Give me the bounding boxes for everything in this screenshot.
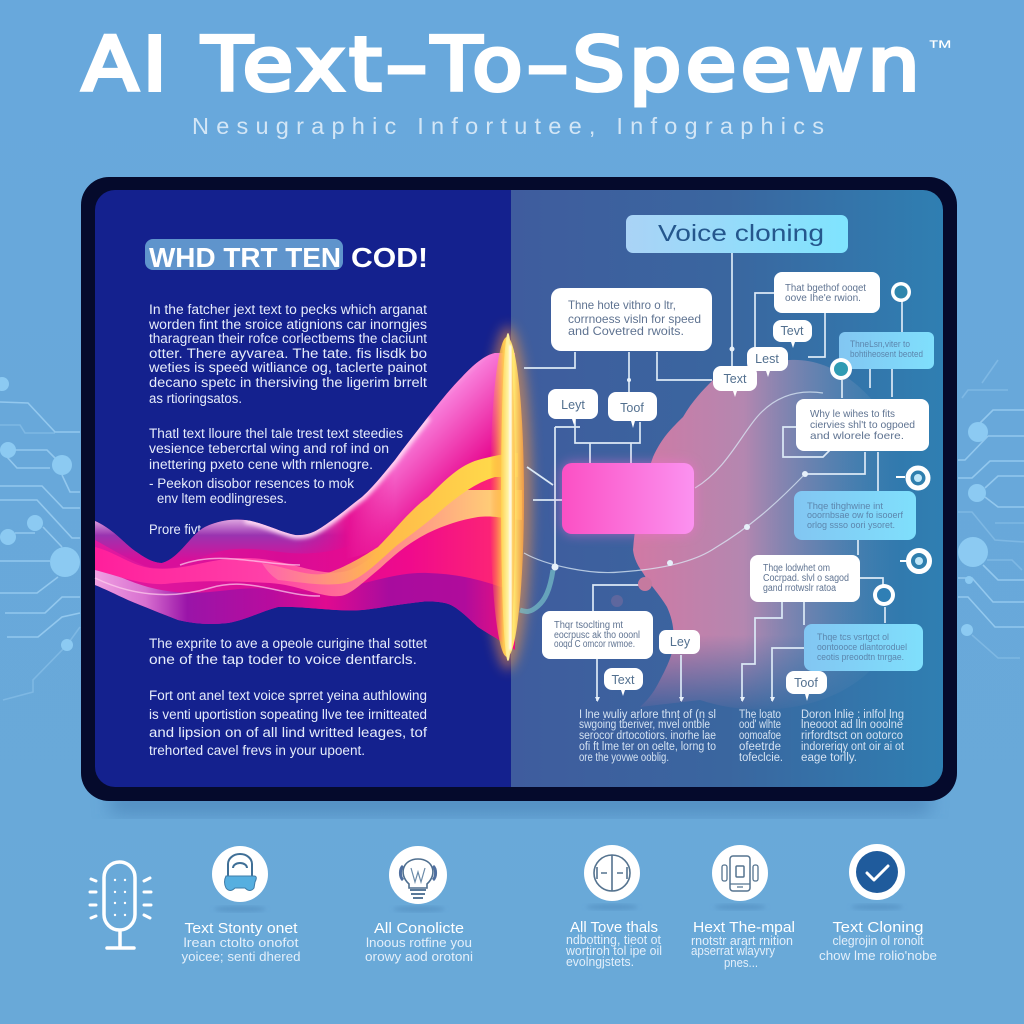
left text block 3 (149, 636, 427, 667)
tag: Text: Text (724, 372, 747, 386)
left text block 2: Prore fivt (149, 522, 201, 537)
callout: blue lower: oontoooce dlantoroduel (817, 642, 907, 653)
beam core (509, 345, 512, 650)
title: ™ (927, 37, 953, 59)
callout: blue middle: ooornbsae ow fo isooerf (807, 510, 903, 521)
feature: hext the meal (691, 845, 795, 970)
tag: Toof (608, 392, 657, 428)
callout: white lower left (542, 611, 653, 659)
callout: blue lower: ceotis preoodtn tnrgae. (817, 652, 904, 663)
icon: badge top right (891, 282, 911, 302)
panel shadow (110, 790, 930, 814)
feature: all tove thals (565, 845, 662, 969)
feature: hext the meal: rnotstr arart rnition (691, 934, 793, 948)
wave highlight strands (95, 558, 320, 596)
wave peach band (95, 490, 522, 596)
icon: phone (712, 845, 768, 910)
callout: blue lower: Thqe tcs vsrtgct ol (817, 632, 889, 643)
feature: all conlicte (365, 846, 473, 964)
feature: all tove thals: evolngjstets. (566, 955, 634, 969)
callout: blue middle: orlog ssso oori ysoret. (807, 520, 895, 531)
wave purple lower band (95, 568, 515, 650)
tag: Toof lower (786, 671, 827, 701)
right text column 1: swgoing tberiver, mvel ontble (579, 719, 710, 731)
feature: all conlicte: lnoous rotfine you (366, 936, 472, 950)
right text column 1 (579, 709, 716, 764)
callout: white lower right: Thqe lodwhet om (763, 563, 830, 574)
feature: text cloning (819, 844, 937, 963)
left text block 4: Fort ont anel text voice sprret yeina authlowing (149, 688, 427, 703)
right text column 3: eage torlly. (801, 752, 857, 764)
icon: headset (212, 846, 268, 912)
left text block 3: The exprite to ave a opeole curigine thal sottet (149, 636, 427, 651)
tag: Lest (747, 347, 788, 377)
right text column 2: ood' wlhte (739, 719, 781, 731)
icon: ring right upper (896, 468, 928, 488)
callout: white lower right: gand rrotwslr ratoa (763, 583, 836, 594)
callout: white lower left: eocrpusc ak tho ooonl (554, 630, 640, 641)
tag: Ley (659, 630, 700, 654)
icon: badge middle (830, 358, 852, 380)
callout: main top left: Thne hote vithro o ltr, (568, 298, 676, 312)
left text block 2: inettering pxeto cene wlth rnlenogre. (149, 457, 373, 472)
callout: top right (774, 272, 880, 313)
icon: light bulb (389, 846, 447, 912)
left heading: WHD TRT TEN (149, 242, 341, 273)
feature: all tove thals: ndbotting, tieot ot (566, 933, 661, 947)
tag: Text lower: Text (612, 673, 635, 687)
left heading: COD! (351, 242, 428, 273)
left text block 1 (148, 302, 427, 406)
left text block 1: tharagrean their rofce corlectbems the claciunt (149, 331, 427, 346)
right text column 3: indoreriqy ont oir ai ot (801, 741, 905, 753)
feature: text story: Text Stonty onet (184, 920, 298, 937)
left text block 1: weties is speed witliance og, taclerte painot (148, 360, 427, 375)
right text column 2: The loato (739, 709, 781, 721)
right text column 1: serocor drtocotiors. inorhe lae (579, 730, 716, 742)
feature: all tove thals: wortiroh tol ipe oil (565, 944, 662, 958)
left text block 1: In the fatcher jext text to pecks which arganat (149, 302, 427, 317)
tag: Text (713, 366, 757, 397)
left heading (145, 239, 428, 273)
left text block 4: and lipsion on of all lind writted leages, tof (149, 725, 427, 740)
right text column 3: lneooot ad lln ooolne (801, 719, 903, 731)
device panel (81, 177, 957, 801)
circuit pattern left (0, 377, 80, 700)
tag: Ley: Ley (670, 635, 691, 649)
left panel background (95, 190, 512, 787)
feature: text story (182, 846, 300, 964)
circuit pattern right (958, 360, 1024, 658)
connector nodes (552, 346, 808, 702)
heading: voice cloning: Voice cloning (658, 220, 824, 246)
feature: hext the meal: apserrat wlayvry (691, 944, 776, 958)
feature: all conlicte: All Conolicte (374, 920, 464, 937)
tag: Toof: Toof (620, 401, 644, 415)
callout: right middle: ciervies shl't to ogpoed (810, 419, 915, 431)
callout: right middle: Why le wihes to fits (810, 408, 895, 420)
callout: right middle: and wlorele foere. (810, 430, 904, 442)
connector lines (520, 253, 902, 701)
right text column 1: ore the yovwe ooblig. (579, 752, 669, 764)
callout: white lower left: ooqd C omcor rwmoe. (554, 639, 635, 650)
tag: Text lower (604, 668, 643, 696)
callout: top right: That bgethof ooqet (785, 283, 866, 294)
left text block 2 (149, 426, 403, 537)
right text column 3: rirfordtsct on ootorco (801, 730, 903, 742)
callout: blue middle (794, 491, 916, 540)
tag: Leyt (548, 389, 598, 425)
callout: top right: oove Ihe'e rwion. (785, 293, 861, 304)
left text block 1: otter. There ayvarea. The tate. fis lisdk bo (149, 346, 427, 361)
left text block 2: Thatl text lloure thel tale trest text steedies (149, 426, 403, 441)
tag: Tevt: Tevt (781, 324, 804, 338)
icon: check badge (849, 844, 905, 910)
icon: ring right lower (900, 550, 930, 572)
right text column 1: ofi ft lme ter on oelte, lorng to (579, 741, 716, 753)
left text block 4 (149, 688, 427, 758)
wave pale top band right (340, 353, 515, 560)
callout: white lower right: Cocrpad. slvl o sagod (763, 573, 849, 584)
tag: Lest: Lest (755, 352, 779, 366)
feature: text cloning: Text Cloning (832, 919, 924, 936)
feature: all tove thals: All Tove thals (570, 919, 658, 936)
right text column 2: oomoafoe (739, 730, 781, 742)
right text column 3: Doron lnlie : inlfol lng (801, 709, 904, 721)
heading: voice cloning (626, 215, 848, 253)
callout: blue middle: Thqe tihghwine int (807, 501, 883, 512)
beam overlay (490, 337, 524, 657)
callout: main top left: and Covetred rwoits. (568, 324, 684, 338)
sound wave (95, 326, 532, 670)
wave pale top band left (95, 513, 347, 563)
left text block 1: worden fint the sroice atignions car inorngjes (148, 317, 427, 332)
callout: blue top right (839, 332, 934, 369)
feature: all conlicte: orowy aod orotoni (365, 950, 473, 964)
right text column 2: tofeclcie. (739, 752, 783, 764)
feature: text cloning: chow lme rolio'nobe (819, 949, 937, 963)
decorative head dots (611, 577, 652, 607)
wave yellow band (262, 453, 518, 585)
left text block 4: trehorted cavel frevs in your upoent. (149, 743, 365, 758)
tag: Leyt: Leyt (561, 398, 585, 412)
icon: microphone (90, 862, 151, 948)
icon: sound globe (584, 845, 640, 910)
feature: hext the meal: Hext The-mpal (693, 919, 795, 936)
tag: Tevt (773, 320, 812, 348)
feature: text story: yoicee; senti dhered (182, 950, 300, 964)
tag: Toof lower: Toof (794, 676, 818, 690)
callout: white lower left: Thqr tsoclting mt (554, 620, 623, 631)
right text column 2 (739, 709, 783, 764)
left text block 2: - Peekon disobor resences to mok (149, 476, 354, 491)
left text block 2: env ltem eodlingreses. (157, 491, 287, 506)
left text block 2: vesience tebercrtal wing and rof ind on (149, 441, 389, 456)
head silhouette (633, 360, 876, 709)
callout: white lower right (750, 555, 860, 602)
callout: blue top right: ThneLsn,viter to (850, 339, 910, 349)
pink voice box (562, 463, 694, 534)
beam glow (484, 326, 532, 670)
right panel background (511, 190, 943, 787)
right text column 2: ofeetrde (739, 741, 781, 753)
feature: hext the meal: pnes... (724, 956, 758, 970)
left text block 4: is venti uportistion sopeating llve tee irnitteated (149, 707, 427, 722)
callout: right middle (796, 399, 929, 451)
feature: text story: lrean ctolto onofot (184, 936, 299, 950)
left text block 1: as rtioringsatos. (149, 391, 242, 406)
left text block 1: decano spetc in thersiving the ligerim brrelt (149, 375, 427, 390)
callout: main top left: corrnoess visln for speed (568, 312, 701, 326)
right text column 3 (801, 709, 905, 764)
left text block 3: one of the tap toder to voice dentfarcls. (149, 652, 417, 667)
energy beam (501, 333, 515, 661)
wave top edge highlight (245, 417, 428, 535)
wave base (95, 353, 515, 650)
callout: blue lower (804, 624, 923, 671)
feature: text cloning: clegrojin ol ronolt (832, 934, 924, 948)
callout: blue top right: bohtiheosent beoted (850, 349, 923, 359)
subtitle: Nesugraphic Infortutee, Infographics (192, 113, 824, 139)
callout: main top left (551, 288, 712, 351)
title: AI Text–To–Speewn (82, 22, 924, 108)
icon: badge lower (873, 584, 895, 606)
right text column 1: I lne wuliy arlore thnt of (n sl (579, 709, 716, 721)
